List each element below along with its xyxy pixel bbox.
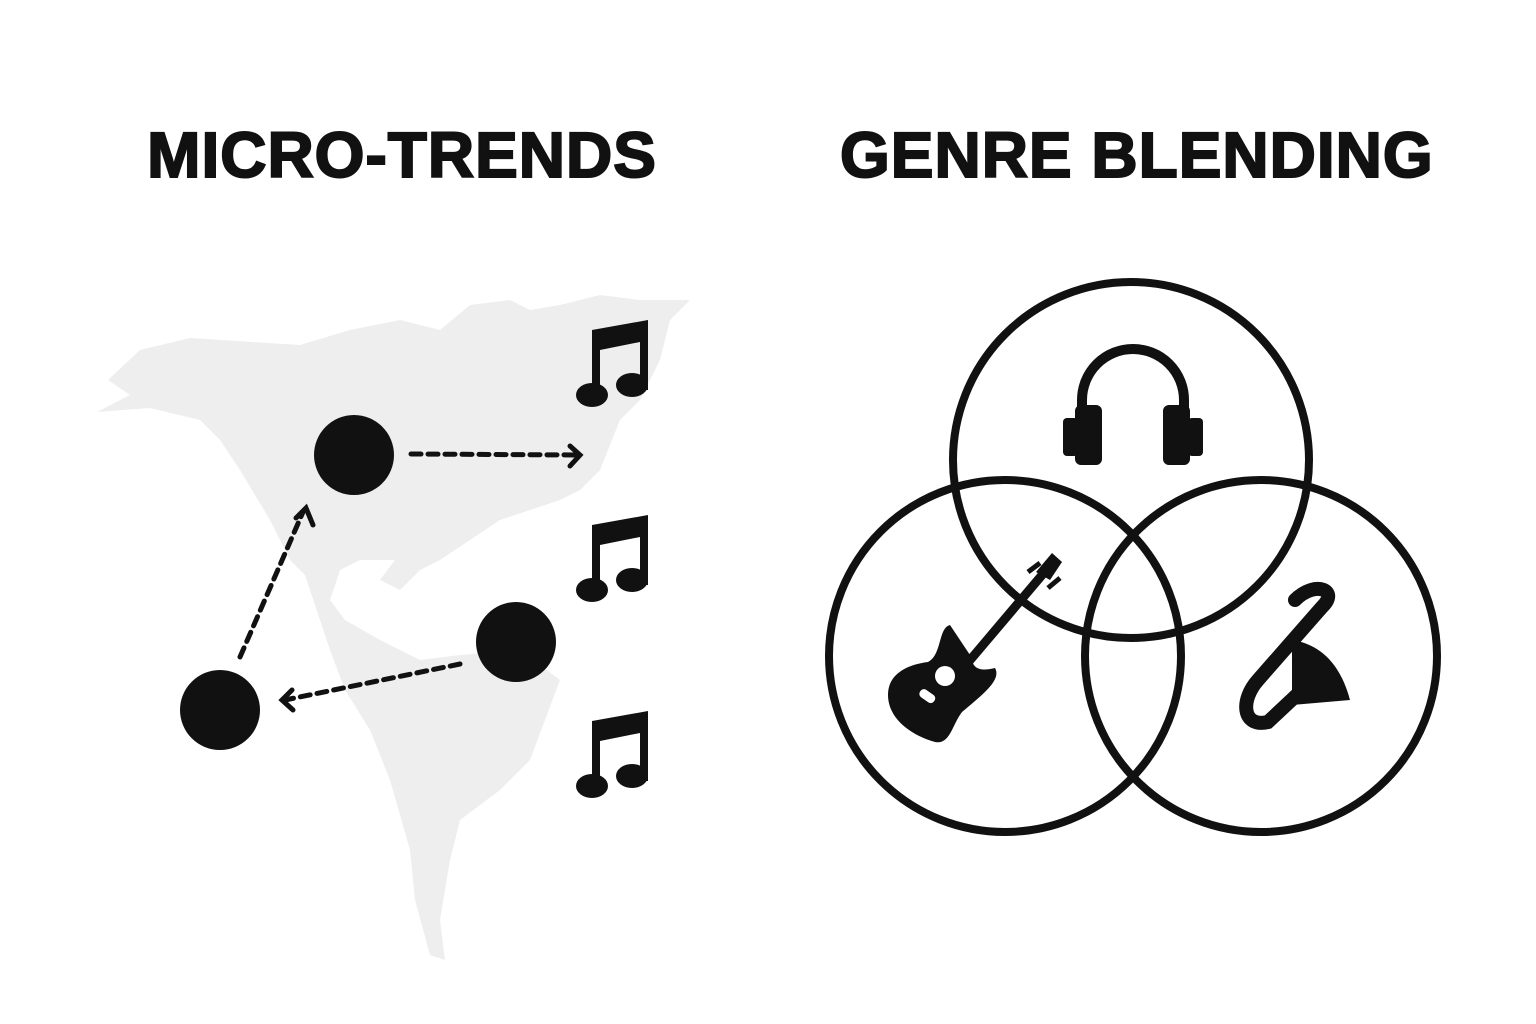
icon: saxophone — [1246, 589, 1350, 723]
title: genre blending: GENRE BLENDING — [840, 119, 1434, 191]
dot: west — [180, 670, 260, 750]
icon: music note 2 — [576, 515, 648, 602]
title: micro-trends: MICRO-TRENDS — [147, 119, 657, 191]
map: americas — [97, 295, 690, 960]
icon: headphones — [1063, 349, 1203, 465]
arrow: up — [240, 508, 313, 657]
arrow: to right — [411, 446, 580, 466]
icon: music note 1 — [576, 320, 648, 407]
icon: guitar — [888, 553, 1062, 742]
dot: north america — [314, 415, 394, 495]
arrow: left — [282, 664, 460, 710]
icon: music note 3 — [576, 711, 648, 798]
venn diagram — [829, 282, 1437, 832]
dot: south — [476, 602, 556, 682]
